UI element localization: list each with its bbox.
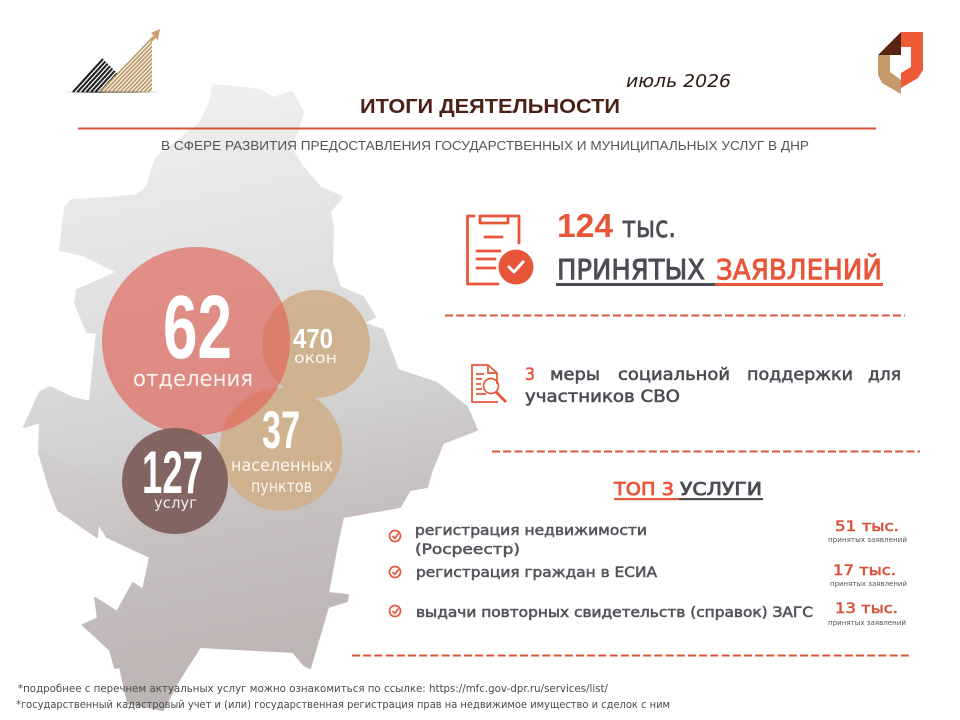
text: social support measures: социальной	[618, 365, 730, 385]
footnotes	[16, 683, 670, 711]
item: civil registry certificates: принятых заявлений	[828, 619, 906, 627]
item: civil registry certificates: 13 тыс.	[835, 601, 898, 617]
subtitle: В СФЕРЕ РАЗВИТИЯ ПРЕДОСТАВЛЕНИЯ ГОСУДАРСТВЕННЫХ И МУНИЦИПАЛЬНЫХ УСЛУГ В ДНР	[161, 139, 809, 153]
logo: rising chart with arrow	[64, 29, 160, 93]
heading: top 3 services: ТОП 3	[613, 480, 674, 500]
item: ESIA registration	[390, 563, 907, 588]
item: real estate registration	[390, 519, 907, 558]
headline: applications accepted: тыс.	[622, 210, 676, 244]
bubble: 470 windows	[262, 290, 370, 398]
footnotes: *подробнее с перечнем актуальных услуг можно ознакомиться по ссылке: https://mfc.gov-dpr.ru/services/list/	[18, 683, 608, 695]
text: social support measures	[525, 365, 901, 407]
header rule	[78, 128, 876, 130]
text: social support measures: участников СВО	[525, 387, 680, 407]
icon: document with check	[468, 216, 534, 284]
bubble: 62 offices	[102, 247, 290, 435]
bubble: 470 windows: 470	[293, 323, 333, 354]
text: social support measures: 3	[525, 365, 535, 385]
headline: applications accepted: 124	[557, 207, 614, 244]
list: top services	[390, 519, 907, 627]
heading: top 3 services	[613, 480, 763, 500]
bubble: 127 services: 127	[142, 439, 203, 506]
text: social support measures: для	[868, 365, 901, 385]
item: ESIA registration: регистрация граждан в ЕСИА	[416, 565, 657, 581]
item: ESIA registration: принятых заявлений	[830, 580, 907, 588]
headline: applications accepted	[556, 207, 883, 286]
item: real estate registration: (Росреестр)	[415, 542, 520, 558]
bubble: 37 settlements: пунктов	[251, 477, 312, 497]
map of the region	[24, 85, 477, 710]
bubble: 37 settlements: населенных	[231, 456, 333, 476]
headline: applications accepted: ЗАЯВЛЕНИЙ	[716, 252, 882, 286]
headline: applications accepted: ПРИНЯТЫХ	[557, 253, 705, 286]
item: real estate registration: регистрация недвижимости	[415, 523, 647, 539]
bubble: 62 offices: 62	[163, 278, 232, 378]
item: ESIA registration: 17 тыс.	[833, 563, 896, 579]
logo: MFC emblem	[878, 32, 923, 94]
bubble: 62 offices: отделения	[133, 367, 253, 392]
footnotes: *государственный кадастровый учет и (или) государственная регистрация прав на недвижимое имущество и сделок с ним	[16, 699, 670, 711]
item: real estate registration: 51 тыс.	[835, 519, 899, 535]
bubble: 127 services	[122, 428, 228, 534]
item: real estate registration: принятых заявлений	[828, 536, 907, 544]
bubble: 470 windows: окон	[294, 349, 337, 367]
stat bubbles	[102, 247, 370, 534]
bubble: 37 settlements: 37	[262, 401, 300, 460]
text: social support measures: поддержки	[747, 365, 853, 385]
icon: document with magnifier	[472, 365, 506, 402]
heading: top 3 services: УСЛУГИ	[680, 480, 762, 500]
item: civil registry certificates: выдачи повторных свидетельств (справок) ЗАГС	[416, 605, 813, 621]
date: июль 2026	[626, 71, 731, 92]
bubble: 127 services: услуг	[154, 494, 197, 512]
bubble: 37 settlements	[220, 388, 342, 510]
item: civil registry certificates	[390, 601, 906, 627]
title: ИТОГИ ДЕЯТЕЛЬНОСТИ	[360, 96, 620, 118]
text: social support measures: меры	[550, 365, 600, 385]
